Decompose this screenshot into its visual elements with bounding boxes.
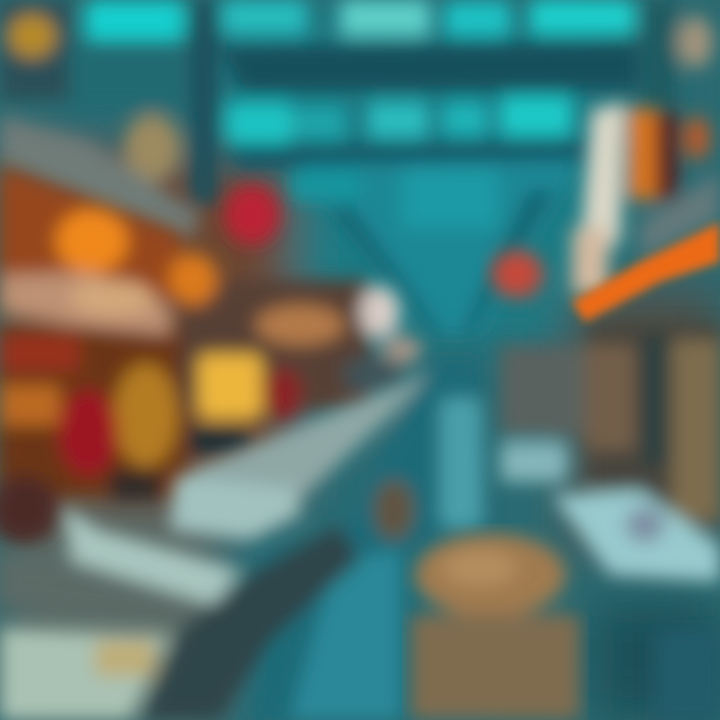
ceiling: teal skylight grid [0, 0, 713, 335]
central aisle and counters [0, 360, 500, 720]
left market stalls [0, 165, 422, 544]
foreground cardboard box [410, 533, 580, 720]
right stalls and orange awning [491, 102, 720, 720]
icon: orange awning [572, 222, 720, 322]
